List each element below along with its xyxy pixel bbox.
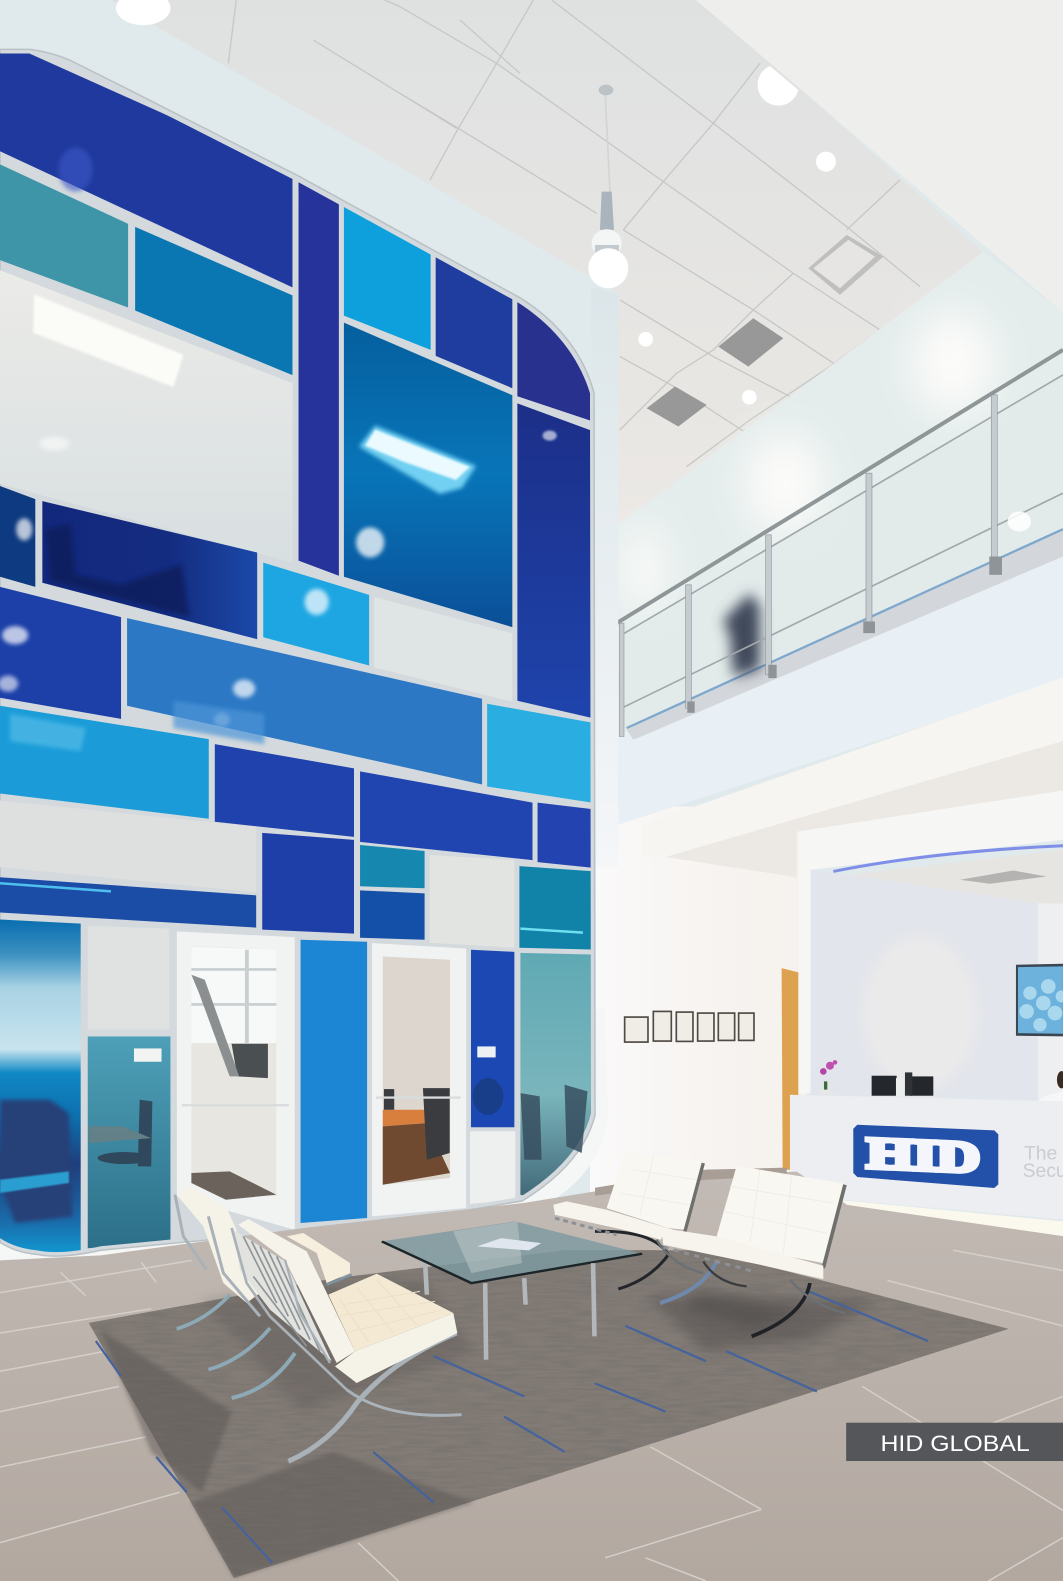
post brackets	[687, 557, 1002, 713]
floor tile lines	[0, 1250, 1063, 1581]
reflections	[0, 147, 557, 751]
magazine	[477, 1238, 541, 1250]
desk tagline: The	[1024, 1144, 1057, 1165]
arch soffit	[798, 790, 1063, 1093]
framed certificates	[625, 1011, 754, 1042]
rug blocks	[101, 1331, 232, 1492]
white lower band	[0, 1008, 608, 1270]
wall light glows	[623, 313, 993, 615]
chair reflection	[89, 1100, 152, 1166]
glass wall	[0, 40, 608, 1270]
blurred person	[723, 593, 760, 676]
TV screen	[1016, 964, 1063, 1036]
handrail	[617, 350, 1063, 623]
under-desk light	[842, 1200, 1063, 1240]
chair rear left	[175, 1186, 352, 1370]
location label	[846, 1423, 1063, 1461]
wall frame	[0, 49, 595, 1256]
chair front right	[620, 1156, 845, 1336]
wall column	[591, 287, 618, 867]
right room silhouette	[521, 1093, 542, 1160]
coloured glass panels	[0, 40, 605, 1260]
chairs right	[553, 1151, 845, 1336]
white door B	[372, 943, 466, 1216]
plant silhouette	[473, 1078, 503, 1115]
upper right soffit	[696, 0, 1063, 313]
reception desk	[790, 1095, 1063, 1220]
reception walls	[811, 870, 1037, 1100]
upper gallery wall	[618, 252, 1063, 766]
pendant lamp	[588, 85, 628, 288]
chair rear right	[553, 1151, 703, 1289]
straps	[233, 1230, 332, 1361]
ceiling vent	[960, 870, 1047, 884]
conference room silhouette	[0, 931, 588, 1230]
desk monitors	[872, 1072, 933, 1096]
HID logo: HID	[867, 1129, 980, 1182]
door	[782, 968, 798, 1170]
seat cushion	[328, 1274, 453, 1351]
cushion tufts	[620, 1156, 833, 1253]
rug	[89, 1250, 1009, 1578]
ceiling	[111, 0, 983, 524]
chair shadow	[683, 1290, 800, 1330]
ceiling tile grid	[228, 0, 920, 467]
floor	[0, 1172, 1063, 1581]
reception ceiling	[850, 850, 1063, 904]
ceiling lights	[638, 66, 836, 405]
chairs left	[175, 1186, 462, 1461]
white door A	[177, 931, 295, 1230]
glass table	[382, 1221, 642, 1360]
receptionist	[1037, 1071, 1063, 1101]
HID logo	[853, 1125, 998, 1188]
location label: HID GLOBAL	[880, 1431, 1030, 1456]
rug blue stripes	[96, 1291, 928, 1563]
railing posts	[619, 395, 997, 736]
blue LED strip	[833, 846, 1063, 871]
reception area	[625, 790, 1063, 1240]
balcony fascia	[618, 539, 1063, 877]
orchid	[820, 1060, 837, 1094]
chair front left	[232, 1219, 462, 1461]
sign labels	[134, 1048, 162, 1062]
lower white wall	[590, 807, 807, 1195]
skirting	[595, 1168, 787, 1196]
top ceiling light	[116, 0, 170, 25]
balcony railing	[617, 350, 1063, 740]
ceiling vents	[808, 235, 883, 295]
ceiling fixtures	[588, 66, 883, 427]
